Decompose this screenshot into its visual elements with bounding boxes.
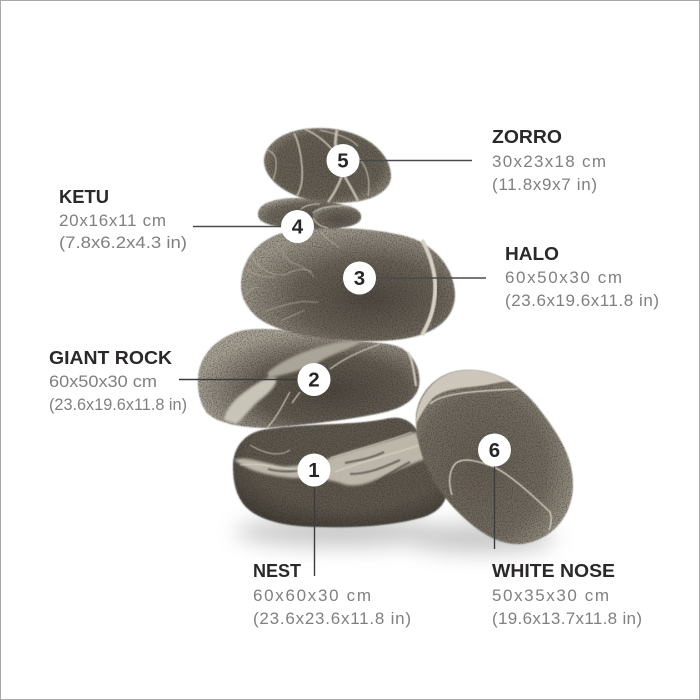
badge 1: 1 <box>308 459 320 482</box>
badge 6: 6 <box>489 439 500 462</box>
label: zorro: (11.8x9x7 in) <box>492 175 597 194</box>
label: white nose <box>492 561 642 628</box>
stone 5: zorro <box>264 128 391 203</box>
badge 4: 4 <box>292 216 304 238</box>
floor shadow <box>235 518 555 552</box>
label: zorro: 30x23x18 cm <box>492 152 606 171</box>
label: ketu: 20x16x11 cm <box>59 211 166 230</box>
label: giant rock: 60x50x30 cm <box>49 372 157 391</box>
leader line: giant rock <box>179 378 300 380</box>
label: halo: (23.6x19.6x11.8 in) <box>505 291 659 310</box>
leader line: zorro <box>358 160 472 162</box>
badge 1 <box>298 454 330 486</box>
leader line: halo <box>374 277 486 279</box>
label: white nose: WHITE NOSE <box>492 561 615 581</box>
label: ketu: (7.8x6.2x4.3 in) <box>59 233 187 252</box>
badge 3 <box>343 262 376 294</box>
label: white nose: 50x35x30 cm <box>492 586 609 605</box>
ketu small pebble <box>313 206 361 228</box>
label: giant rock: GIANT ROCK <box>49 348 172 368</box>
stone 3: halo <box>241 228 455 341</box>
badge 4 <box>281 210 314 243</box>
label: nest: (23.6x23.6x11.8 in) <box>253 609 411 628</box>
label: halo: HALO <box>505 244 559 264</box>
stone 4: ketu <box>258 198 361 229</box>
badge 2 <box>298 363 330 396</box>
ketu large pebble <box>258 198 356 229</box>
badge 2: 2 <box>308 368 320 392</box>
badge 6 <box>478 434 511 466</box>
badge 3: 3 <box>354 267 365 290</box>
label: giant rock <box>49 348 187 414</box>
leader line: nest <box>314 486 316 576</box>
label: nest <box>253 561 411 628</box>
label: ketu <box>59 187 187 252</box>
stone 2: giant rock <box>198 329 419 428</box>
label: halo <box>505 244 659 310</box>
label: nest: NEST <box>253 561 301 581</box>
label: giant rock: (23.6x19.6x11.8 in) <box>49 395 187 414</box>
label: ketu: KETU <box>59 187 109 207</box>
label: white nose: (19.6x13.7x11.8 in) <box>492 609 642 628</box>
badge 5: 5 <box>337 150 349 172</box>
badge 5 <box>326 144 360 177</box>
label: zorro <box>492 127 606 194</box>
label: halo: 60x50x30 cm <box>505 268 622 287</box>
stone 6: white nose <box>416 370 573 544</box>
leader line: white nose <box>494 466 496 549</box>
label: nest: 60x60x30 cm <box>253 586 371 605</box>
stone 1: nest <box>233 418 446 527</box>
label: zorro: ZORRO <box>492 127 562 147</box>
leader line: ketu <box>193 226 284 228</box>
